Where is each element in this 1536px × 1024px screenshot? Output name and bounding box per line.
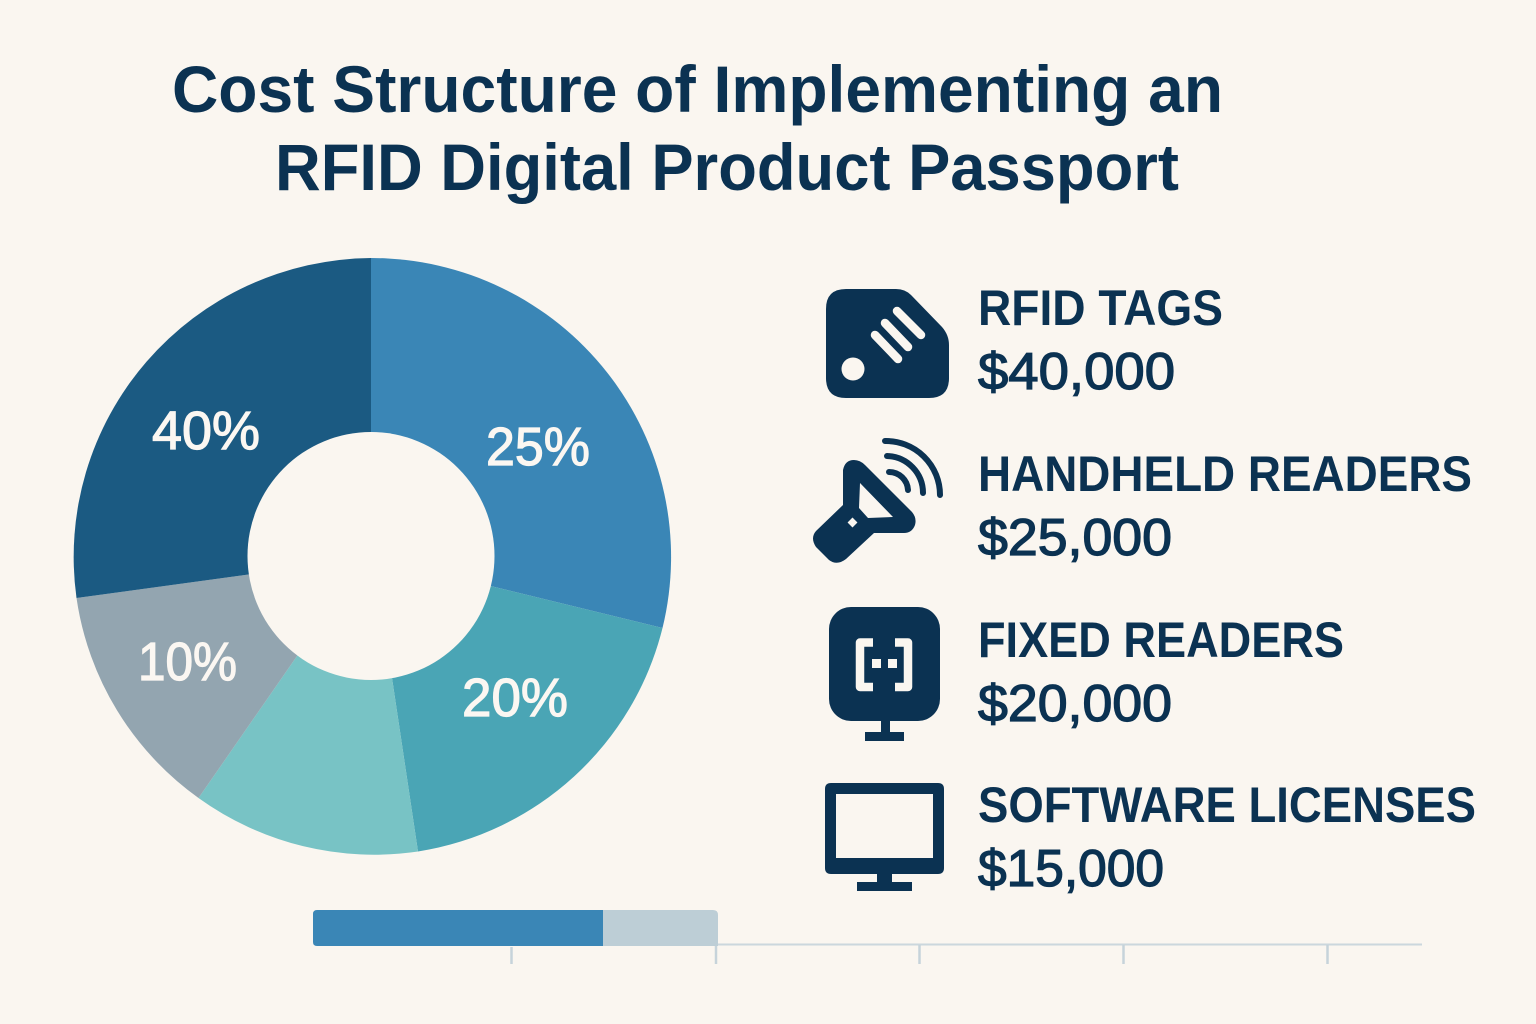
- label: 20%: 20%: [462, 668, 568, 728]
- label: 25%: 25%: [486, 417, 590, 477]
- text: RFID tags: [978, 280, 1223, 401]
- donut chart: [74, 258, 671, 855]
- icon: handheld reader: [813, 441, 940, 563]
- text: software licenses: [978, 777, 1476, 898]
- title: [172, 52, 1223, 204]
- label: 40%: 40%: [152, 401, 260, 461]
- text: fixed readers: FIXED READERS: [978, 612, 1344, 668]
- icon: fixed reader: [829, 607, 940, 741]
- segment: 10%: [76, 500, 371, 798]
- donut hole: [248, 432, 494, 680]
- segment: 40%: [74, 258, 371, 598]
- icon: RFID tag: [826, 289, 949, 398]
- axis line: [716, 944, 1422, 946]
- bar remainder: [603, 910, 718, 946]
- icon: monitor: [825, 783, 944, 891]
- progress bar with axis: [313, 910, 1422, 964]
- text: handheld readers: $25,000: [978, 509, 1172, 567]
- text: fixed readers: $20,000: [978, 675, 1172, 733]
- text: RFID tags: RFID TAGS: [978, 280, 1223, 336]
- text: software licenses: SOFTWARE LICENSES: [978, 777, 1476, 833]
- axis ticks: [512, 945, 1328, 964]
- bar fill: [313, 910, 603, 946]
- label: 10%: 10%: [138, 632, 237, 692]
- segment: 20%: [371, 500, 662, 852]
- segment: unlabelled 15%: [198, 500, 418, 855]
- text: handheld readers: HANDHELD READERS: [978, 446, 1472, 502]
- text: handheld readers: [978, 446, 1472, 567]
- text: software licenses: $15,000: [978, 840, 1164, 898]
- segment: 25%: [371, 258, 671, 628]
- text: RFID tags: $40,000: [978, 343, 1175, 401]
- title: Cost Structure of Implementing an: [172, 52, 1223, 126]
- title: RFID Digital Product Passport: [275, 130, 1179, 204]
- text: fixed readers: [978, 612, 1344, 733]
